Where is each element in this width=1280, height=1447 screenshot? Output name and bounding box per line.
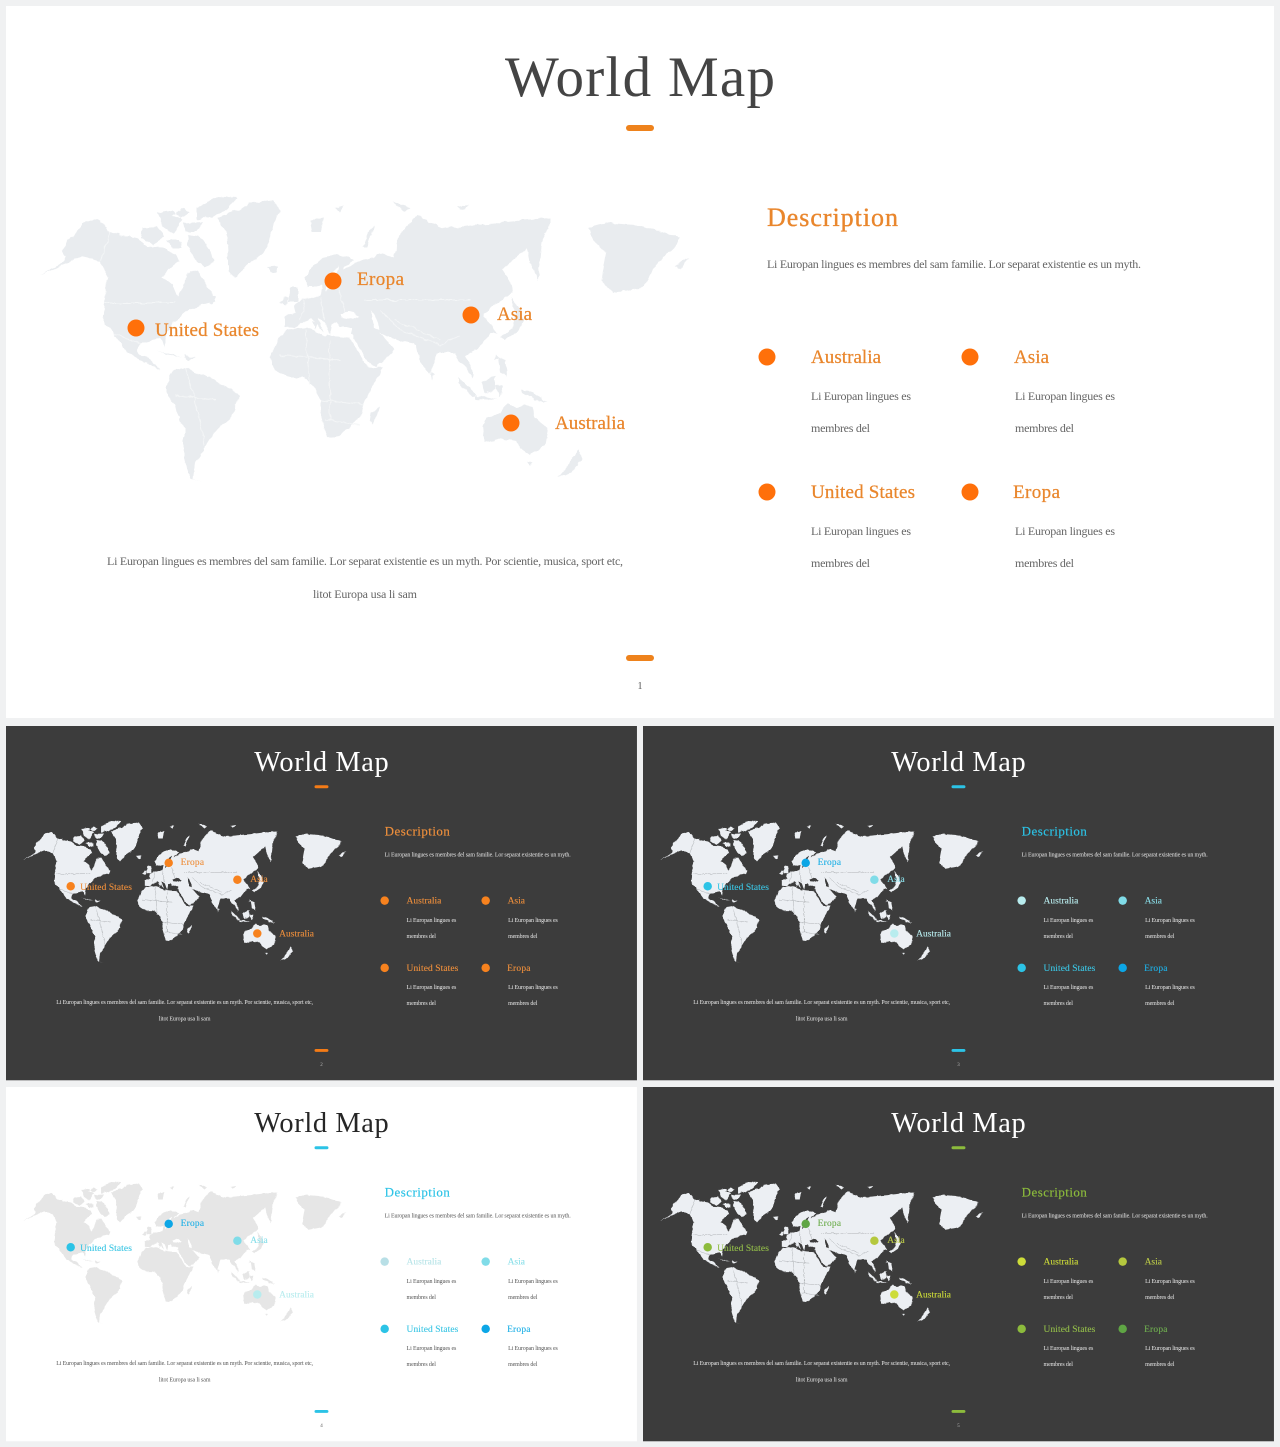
page number: 2: [320, 1063, 323, 1068]
footer accent bar: [952, 1410, 965, 1413]
legend: United States: membres del: [407, 1001, 436, 1007]
pin: Asia: Asia: [250, 875, 269, 885]
legend: Australia: [1017, 896, 1094, 940]
panel: slide 2: [6, 726, 637, 1080]
world map with pins: [40, 197, 690, 482]
legend: United States: Li Europan lingues es: [1044, 1346, 1094, 1352]
description heading: Description: [1022, 1184, 1087, 1199]
legend: Eropa: Eropa: [1144, 1325, 1168, 1335]
legend: Asia: Li Europan lingues es: [1145, 918, 1196, 924]
legend: Australia: [758, 347, 911, 435]
legend: United States: Li Europan lingues es: [407, 985, 457, 991]
pin: Eropa: [324, 269, 405, 290]
pin: Australia: Australia: [916, 1290, 952, 1300]
pin: Asia: [233, 1236, 269, 1246]
legend: Eropa: Li Europan lingues es: [1145, 985, 1196, 991]
legend: Eropa: [1118, 1325, 1196, 1368]
legend: Asia: Li Europan lingues es: [1015, 389, 1115, 403]
legend: Eropa: [1118, 964, 1196, 1007]
map caption: Li Europan lingues es membres del sam familie. Lor separat existentie es un myth. Por scientie, musica, sport etc,: [693, 1360, 951, 1367]
map caption: litot Europa usa li sam: [159, 1017, 211, 1023]
legend: Australia: Li Europan lingues es: [1044, 918, 1094, 924]
panel: slide 4: [6, 1087, 637, 1441]
slide 5 background: [643, 1087, 1274, 1441]
footer accent bar: [952, 1049, 965, 1052]
footer accent bar: [315, 1410, 328, 1413]
legend: Eropa: membres del: [508, 1362, 538, 1368]
map caption: litot Europa usa li sam: [313, 587, 418, 601]
pin: Australia: [890, 929, 952, 939]
footer accent bar: [315, 1049, 328, 1052]
legend: United States: United States: [1044, 1325, 1096, 1335]
pin: Eropa: [164, 1219, 205, 1229]
legend: Australia: membres del: [1044, 1295, 1073, 1301]
legend: United States: [380, 964, 459, 1007]
legend: Asia: [481, 896, 559, 940]
pin: United States: United States: [80, 883, 132, 893]
map caption: litot Europa usa li sam: [796, 1378, 848, 1384]
legend: Australia: Australia: [1044, 897, 1079, 907]
pin: Eropa: [801, 1219, 842, 1229]
pin: United States: United States: [80, 1244, 132, 1254]
legend: Eropa: Li Europan lingues es: [508, 985, 559, 991]
map caption: [693, 999, 951, 1023]
pin: Asia: [233, 875, 269, 885]
pin: Asia: Asia: [497, 304, 533, 325]
legend: Asia: Asia: [1145, 1258, 1163, 1268]
legend: Australia: [380, 896, 457, 940]
legend: Australia: Li Europan lingues es: [811, 389, 911, 403]
legend: Australia: membres del: [407, 934, 436, 940]
pin: Asia: Asia: [250, 1236, 269, 1246]
map caption: litot Europa usa li sam: [159, 1378, 211, 1384]
title: World Map: [891, 747, 1026, 778]
legend: Australia: membres del: [1044, 934, 1073, 940]
legend: Australia: Li Europan lingues es: [407, 918, 457, 924]
page number: 5: [957, 1424, 960, 1429]
title accent bar: [952, 1146, 965, 1149]
legend: United States: Li Europan lingues es: [1044, 985, 1094, 991]
pin: Australia: Australia: [555, 413, 626, 434]
legend: Asia: membres del: [1015, 421, 1075, 435]
legend: Asia: Asia: [508, 897, 526, 907]
legend: Eropa: Eropa: [1013, 482, 1061, 503]
pin: United States: United States: [717, 883, 769, 893]
world map with pins: [23, 821, 346, 963]
map caption: [693, 1360, 951, 1384]
legend: Eropa: membres del: [1145, 1362, 1175, 1368]
legend: Asia: Li Europan lingues es: [508, 1279, 559, 1285]
pin: Eropa: Eropa: [818, 858, 842, 868]
description heading: Description: [385, 823, 450, 838]
slide 1 background: [6, 6, 1274, 718]
world map with pins: [660, 1182, 983, 1324]
legend: United States: [1017, 964, 1096, 1007]
legend: Eropa: Eropa: [1144, 964, 1168, 974]
page number: 1: [638, 681, 642, 692]
legend: Australia: Australia: [811, 347, 882, 368]
legend: United States: membres del: [811, 556, 871, 570]
slide 4 background: [6, 1087, 637, 1441]
panel: slide 3: [643, 726, 1274, 1080]
map caption: litot Europa usa li sam: [796, 1017, 848, 1023]
legend: Eropa: [481, 1325, 559, 1368]
legend: Asia: membres del: [1145, 934, 1175, 940]
legend: Eropa: Li Europan lingues es: [1015, 524, 1115, 538]
legend: United States: [1017, 1325, 1096, 1368]
title: World Map: [891, 1108, 1026, 1139]
legend: United States: United States: [407, 1325, 459, 1335]
description text: Li Europan lingues es membres del sam familie. Lor separat existentie es un myth.: [767, 257, 1141, 271]
pin: Australia: Australia: [916, 929, 952, 939]
legend: Eropa: Eropa: [507, 964, 531, 974]
panel: slide 1: [6, 6, 1274, 718]
description heading: Description: [1022, 823, 1087, 838]
pin: United States: United States: [717, 1244, 769, 1254]
pin: Eropa: [801, 858, 842, 868]
title: World Map: [505, 46, 775, 109]
pin: Asia: [870, 1236, 906, 1246]
pin: Australia: Australia: [279, 1290, 315, 1300]
pin: Eropa: Eropa: [181, 1219, 205, 1229]
pin: United States: United States: [155, 320, 259, 341]
legend: Asia: [1118, 896, 1196, 940]
legend: Asia: Asia: [1014, 347, 1050, 368]
description heading: Description: [385, 1184, 450, 1199]
legend: United States: United States: [407, 964, 459, 974]
legend: United States: [758, 482, 915, 570]
legend: Asia: [481, 1257, 559, 1301]
legend: Eropa: Eropa: [507, 1325, 531, 1335]
pin: Australia: [890, 1290, 952, 1300]
legend: Australia: [380, 1257, 457, 1301]
title accent bar: [315, 785, 328, 788]
description text: Li Europan lingues es membres del sam familie. Lor separat existentie es un myth.: [385, 1212, 571, 1219]
map caption: Li Europan lingues es membres del sam familie. Lor separat existentie es un myth. Por scientie, musica, sport etc,: [107, 554, 623, 568]
map caption: Li Europan lingues es membres del sam familie. Lor separat existentie es un myth. Por scientie, musica, sport etc,: [56, 1360, 314, 1367]
pin: Eropa: Eropa: [357, 269, 405, 290]
slide 2 background: [6, 726, 637, 1080]
panel: slide 5: [643, 1087, 1274, 1441]
legend: Eropa: Li Europan lingues es: [508, 1346, 559, 1352]
title accent bar: [315, 1146, 328, 1149]
pin: Australia: Australia: [279, 929, 315, 939]
legend: Australia: [1017, 1257, 1094, 1301]
title: World Map: [254, 1108, 389, 1139]
map caption: Li Europan lingues es membres del sam familie. Lor separat existentie es un myth. Por scientie, musica, sport etc,: [693, 999, 951, 1006]
description text: Li Europan lingues es membres del sam familie. Lor separat existentie es un myth.: [1022, 851, 1208, 858]
legend: Asia: Li Europan lingues es: [1145, 1279, 1196, 1285]
map caption: [56, 999, 314, 1023]
legend: Australia: Li Europan lingues es: [407, 1279, 457, 1285]
description text: Li Europan lingues es membres del sam familie. Lor separat existentie es un myth.: [1022, 1212, 1208, 1219]
slide 3 background: [643, 726, 1274, 1080]
footer accent bar: [626, 655, 654, 661]
legend: Asia: [1118, 1257, 1196, 1301]
title accent bar: [952, 785, 965, 788]
legend: Asia: [962, 347, 1115, 435]
legend: United States: United States: [811, 482, 915, 503]
legend: Eropa: membres del: [1015, 556, 1075, 570]
legend: Asia: Asia: [508, 1258, 526, 1268]
legend: Asia: Asia: [1145, 897, 1163, 907]
pin: Eropa: Eropa: [818, 1219, 842, 1229]
legend: Australia: membres del: [407, 1295, 436, 1301]
legend: United States: Li Europan lingues es: [407, 1346, 457, 1352]
pin: Australia: [253, 1290, 315, 1300]
legend: United States: membres del: [1044, 1362, 1073, 1368]
legend: United States: membres del: [1044, 1001, 1073, 1007]
legend: Eropa: [481, 964, 559, 1007]
legend: United States: membres del: [407, 1362, 436, 1368]
legend: Australia: Australia: [1044, 1258, 1079, 1268]
page number: 4: [320, 1424, 323, 1429]
legend: Australia: membres del: [811, 421, 871, 435]
pin: Asia: Asia: [887, 1236, 906, 1246]
legend: Asia: membres del: [1145, 1295, 1175, 1301]
legend: Australia: Li Europan lingues es: [1044, 1279, 1094, 1285]
legend: Eropa: [962, 482, 1115, 570]
legend: Asia: membres del: [508, 1295, 538, 1301]
legend: United States: United States: [1044, 964, 1096, 974]
pin: Australia: [502, 413, 626, 434]
pin: Asia: Asia: [887, 875, 906, 885]
legend: Australia: Australia: [407, 897, 442, 907]
title accent bar: [626, 125, 654, 131]
description heading: Description: [767, 203, 898, 232]
legend: United States: Li Europan lingues es: [811, 524, 911, 538]
pin: Australia: [253, 929, 315, 939]
legend: Asia: membres del: [508, 934, 538, 940]
map caption: Li Europan lingues es membres del sam familie. Lor separat existentie es un myth. Por scientie, musica, sport etc,: [56, 999, 314, 1006]
page number: 3: [957, 1063, 960, 1068]
pin: Asia: [462, 304, 533, 325]
world map with pins: [23, 1182, 346, 1324]
legend: Eropa: membres del: [1145, 1001, 1175, 1007]
legend: Australia: Australia: [407, 1258, 442, 1268]
legend: Asia: Li Europan lingues es: [508, 918, 559, 924]
legend: Eropa: Li Europan lingues es: [1145, 1346, 1196, 1352]
world map with pins: [660, 821, 983, 963]
map caption: [107, 554, 623, 601]
map caption: [56, 1360, 314, 1384]
legend: United States: [380, 1325, 459, 1368]
description text: Li Europan lingues es membres del sam familie. Lor separat existentie es un myth.: [385, 851, 571, 858]
pin: Eropa: [164, 858, 205, 868]
pin: Eropa: Eropa: [181, 858, 205, 868]
title: World Map: [254, 747, 389, 778]
legend: Eropa: membres del: [508, 1001, 538, 1007]
pin: Asia: [870, 875, 906, 885]
